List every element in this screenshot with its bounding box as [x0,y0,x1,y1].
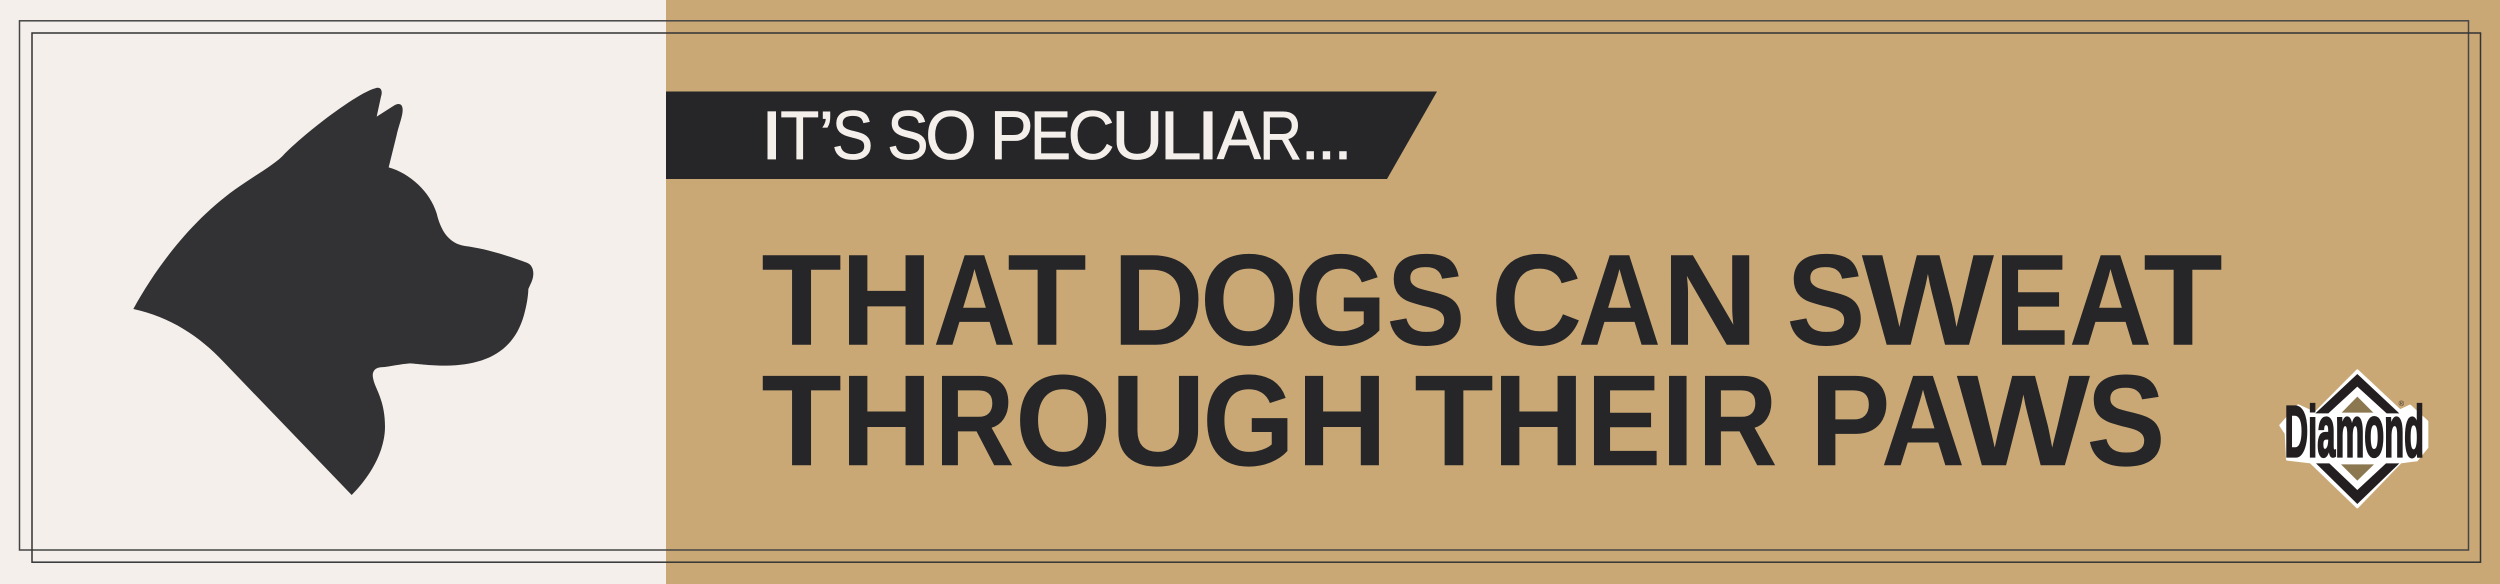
headline line 2: H [1492,347,1584,493]
headline line 1: A [1578,227,1661,373]
logo registered mark: ® [2399,399,2405,408]
headline line 1: G [1294,227,1387,373]
logo tan triangle top [2342,397,2373,413]
kicker text: L [1160,97,1202,174]
banner shape [666,92,1437,179]
headline line 2: A [1881,347,1965,493]
panel: left cream background [0,0,667,584]
kicker text: S [832,97,873,174]
icon: dog head silhouette [133,88,533,495]
headline line 1: S [1786,227,1865,373]
kicker text: U [1112,97,1163,174]
headline line 1: T [2143,227,2223,373]
logo tan triangle bottom [2341,464,2374,481]
headline line 2: T [1414,347,1494,493]
headline line 2: E [1586,347,1661,493]
headline line 2: S [2086,347,2165,493]
logo black diamond band bottom [2316,463,2399,504]
kicker banner [666,92,1437,179]
headline line 2: H [1297,347,1387,493]
kicker text: T [780,97,819,174]
headline line 2: G [1202,347,1295,493]
kicker text: I [760,97,783,174]
headline line 2: H [840,347,932,493]
icon: Diamond logo [2281,371,2427,507]
headline line 1: T [1007,227,1087,373]
kicker text: S [887,97,928,174]
kicker text: . [1301,97,1320,174]
headline line 1: A [2069,227,2152,373]
headline line 1: W [1862,227,1994,373]
kicker text: ’ [819,97,834,174]
kicker text: . [1317,97,1336,174]
headline line 1: O [1200,227,1298,373]
kicker text: R [1259,97,1302,174]
headline line 1: T [761,227,842,373]
headline line 2: O [1015,347,1111,493]
headline line 2: R [935,347,1014,493]
headline line 2: P [1810,347,1890,493]
headline line 2: W [1957,347,2090,493]
headline line 1: E [1994,227,2069,373]
logo black diamond band top [2315,374,2399,413]
kicker text: E [1030,97,1071,174]
panel: right tan background [666,0,2500,584]
kicker text: A [1217,97,1261,174]
headline line 1: C [1491,227,1582,373]
kicker text: O [925,97,977,174]
kicker text: P [990,97,1033,174]
headline line 1: A [933,227,1016,373]
headline line 2: U [1110,347,1206,493]
headline line 2: I [1661,347,1695,493]
headline line 1: D [1112,227,1204,373]
kicker text: . [1333,97,1353,174]
headline line 1: N [1662,227,1758,373]
logo white backing [2281,371,2427,507]
headline line 1: S [1386,227,1465,373]
kicker text: C [1068,97,1114,174]
headline [761,227,2223,493]
kicker text: I [1196,97,1220,174]
headline line 2: R [1698,347,1777,493]
headline line 1: H [840,227,932,373]
headline line 2: T [761,347,842,493]
